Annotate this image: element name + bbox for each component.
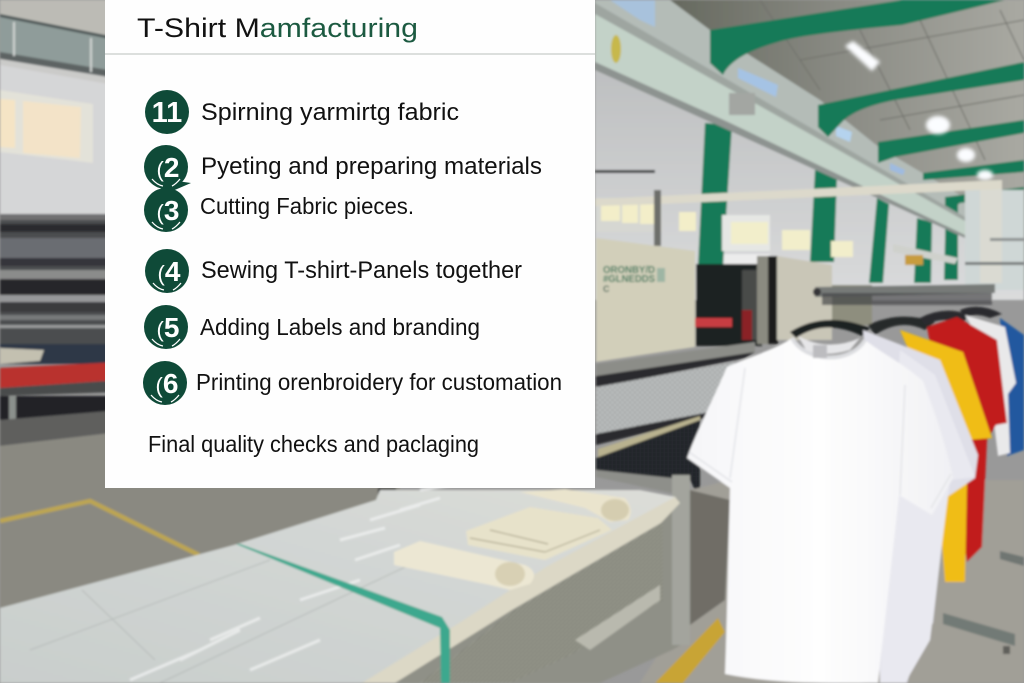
step 7 text: Final quality checks and paclaging <box>148 431 479 457</box>
table top <box>0 490 676 683</box>
green strap <box>236 544 450 683</box>
step 2: Pyeting and preparing materials <box>201 153 542 180</box>
badge 2 <box>144 145 191 192</box>
green roof beams <box>698 0 1024 283</box>
badge 6 <box>143 361 187 405</box>
step 4 <box>145 249 522 293</box>
clothing rack <box>790 284 1002 338</box>
table frame <box>395 480 690 683</box>
badge 4: (4 <box>158 256 181 287</box>
pale t-shirts layered <box>863 330 978 683</box>
conveyor mesh <box>596 342 755 500</box>
table rim <box>362 497 680 683</box>
badge 3 <box>144 188 188 232</box>
badge 5: (5 <box>157 312 179 343</box>
step 3: Cutting Fabric pieces. <box>200 193 414 219</box>
blue t-shirt <box>1000 318 1024 456</box>
badge 1 <box>145 90 189 134</box>
yellow t-shirt <box>900 330 992 582</box>
ceiling lights <box>845 41 1014 205</box>
badge 2: (2 <box>157 152 179 183</box>
badge 6: (6 <box>156 368 178 399</box>
badge 3: (3 <box>157 195 179 226</box>
step 1 <box>145 90 459 134</box>
step 2 <box>144 145 542 192</box>
crane beam <box>595 3 965 238</box>
ceiling <box>670 0 1024 205</box>
upper right: wall behind the beams <box>595 0 1024 300</box>
machinery <box>692 256 872 346</box>
step 5 <box>144 305 480 349</box>
panel: process steps <box>105 0 595 488</box>
left wall and floor <box>0 0 400 620</box>
plastic sheen <box>130 480 480 680</box>
fabric rolls <box>394 489 631 590</box>
step 6 <box>143 361 562 405</box>
floor right <box>640 480 1024 683</box>
cream machine with lettering: #GLNEDDS <box>603 274 655 285</box>
title: T-Shirt M amfacturing <box>137 13 418 43</box>
cream machine with lettering: C <box>603 284 610 294</box>
white overhead pipe <box>595 180 1002 206</box>
step 1: Spirning yarmirtg fabric <box>201 99 459 126</box>
badge 4 <box>145 249 189 293</box>
windows back wall <box>596 198 853 274</box>
step 4: Sewing T-shirt-Panels together <box>201 257 522 284</box>
step 6: Printing orenbroidery for customation <box>196 369 562 395</box>
cream machine with lettering: ORONBY/D <box>603 265 655 276</box>
cream machine with lettering <box>596 238 695 362</box>
step 5: Adding Labels and branding <box>200 314 480 340</box>
front white t-shirt <box>687 336 953 683</box>
conveyor table <box>0 475 690 683</box>
badge 5 <box>144 305 188 349</box>
white t-shirt at back <box>965 315 1016 456</box>
badge 1: 11 <box>152 97 182 129</box>
right background: back wall <box>893 188 1024 290</box>
step 3 <box>144 188 414 232</box>
red t-shirt <box>927 317 1007 562</box>
header divider <box>105 53 595 55</box>
